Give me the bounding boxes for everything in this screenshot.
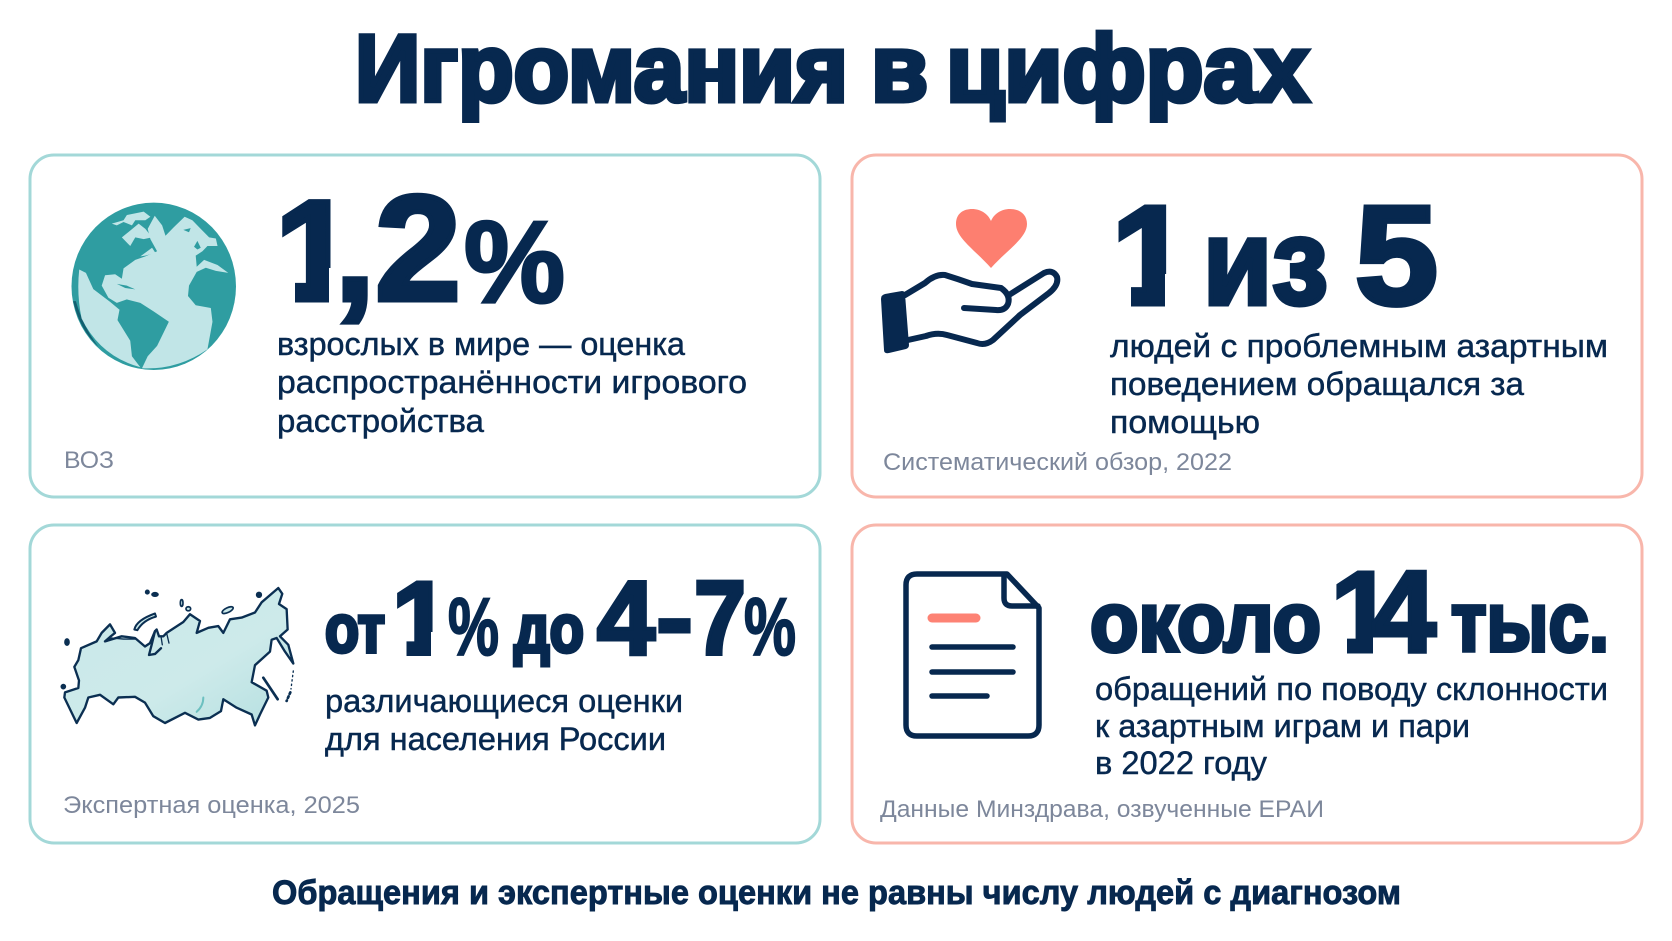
description: взрослых в мире — оценка bbox=[277, 326, 685, 362]
big number: 1 из 5: из bbox=[1203, 194, 1328, 330]
title bbox=[355, 16, 1309, 122]
panel: russia estimates bbox=[30, 525, 820, 843]
description bbox=[1095, 671, 1608, 781]
title: в bbox=[871, 16, 928, 122]
footer note: Обращения и экспертные оценки не равны числу людей с диагнозом bbox=[272, 874, 1401, 912]
big number: от 1% до 4–7%: до bbox=[514, 591, 584, 667]
icon: map of Russia bbox=[62, 588, 293, 725]
big number: 1,2% bbox=[270, 164, 565, 332]
big number: 1 из 5: 1 bbox=[1111, 176, 1190, 334]
source: ВОЗ bbox=[64, 447, 114, 474]
panel: ministry data bbox=[852, 525, 1642, 843]
description: расстройства bbox=[277, 403, 484, 439]
big number: от 1% до 4–7%: % bbox=[448, 582, 499, 673]
description bbox=[277, 326, 747, 439]
big number: от 1% до 4–7% bbox=[325, 560, 796, 677]
description: различающиеся оценки bbox=[325, 683, 683, 719]
big number: от 1% до 4–7%: 4 bbox=[597, 560, 655, 677]
big number: 1,2%: , bbox=[335, 172, 375, 331]
description: людей с проблемным азартным bbox=[1110, 328, 1608, 364]
big number: около 14 тыс.: около bbox=[1090, 575, 1321, 669]
big number: от 1% до 4–7%: % bbox=[744, 582, 796, 673]
icon: hand with heart bbox=[881, 209, 1057, 353]
big number: 1 из 5: 5 bbox=[1355, 176, 1438, 334]
description bbox=[1110, 328, 1608, 440]
big number: от 1% до 4–7%: – bbox=[658, 560, 691, 677]
big number: около 14 тыс.: 1 bbox=[1330, 547, 1395, 677]
big number: 1,2%: % bbox=[464, 197, 565, 327]
big number: около 14 тыс. bbox=[1090, 547, 1609, 677]
description: распространённости игрового bbox=[277, 364, 747, 400]
description: к азартным играм и пари bbox=[1095, 708, 1470, 744]
icon: globe bbox=[71, 203, 236, 370]
big number: около 14 тыс.: 4 bbox=[1372, 547, 1436, 677]
source: Данные Минздрава, озвученные ЕРАИ bbox=[880, 796, 1324, 823]
description: в 2022 году bbox=[1095, 745, 1267, 781]
source: Экспертная оценка, 2025 bbox=[63, 792, 360, 819]
description: помощью bbox=[1110, 404, 1260, 440]
icon: document bbox=[906, 574, 1039, 736]
big number: около 14 тыс.: тыс. bbox=[1451, 575, 1609, 669]
source: Систематический обзор, 2022 bbox=[883, 449, 1232, 476]
big number: от 1% до 4–7%: от bbox=[325, 591, 385, 667]
big number: 1,2%: 1 bbox=[275, 172, 355, 331]
description bbox=[325, 683, 683, 757]
big number: 1,2%: 2 bbox=[375, 164, 461, 332]
panel: help seeking bbox=[852, 155, 1642, 497]
title: Игромания bbox=[355, 16, 848, 122]
big number: 1 из 5 bbox=[1105, 176, 1438, 334]
panel: world statistic bbox=[30, 155, 820, 497]
description: для населения России bbox=[325, 721, 666, 757]
description: обращений по поводу склонности bbox=[1095, 671, 1608, 707]
title: цифрах bbox=[946, 16, 1309, 122]
description: поведением обращался за bbox=[1110, 366, 1524, 402]
big number: от 1% до 4–7%: 1 bbox=[392, 561, 450, 677]
big number: от 1% до 4–7%: 7 bbox=[694, 560, 746, 677]
